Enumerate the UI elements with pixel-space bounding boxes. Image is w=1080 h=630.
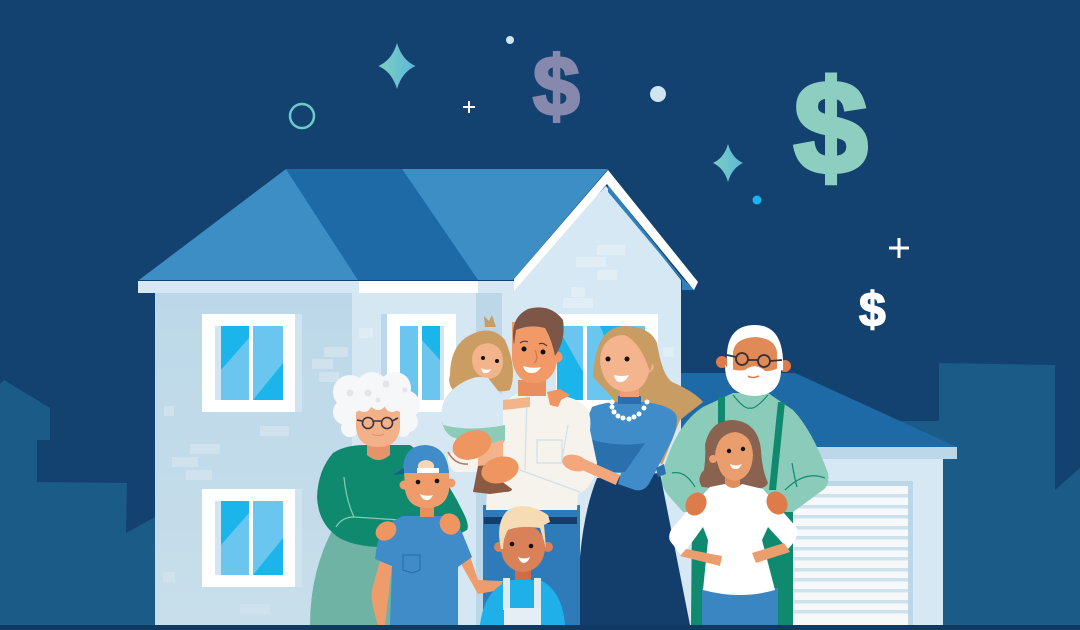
grandma skirt	[310, 525, 395, 625]
sleeve creases	[672, 463, 825, 490]
mom fringe	[622, 328, 653, 372]
garage eave	[680, 447, 957, 459]
girl jeans	[702, 588, 778, 625]
boy arms	[372, 556, 503, 625]
small boy shirt	[480, 580, 565, 625]
roof	[139, 169, 608, 280]
daughter boots	[473, 466, 512, 494]
window upper left	[202, 314, 302, 412]
mom necklace	[610, 400, 650, 422]
dad ear	[552, 352, 562, 362]
dad shirt	[448, 392, 597, 510]
girl face	[715, 432, 753, 481]
window right	[556, 314, 658, 412]
wall bricks	[163, 245, 674, 614]
grandma sweater	[317, 445, 468, 547]
dad trousers	[483, 505, 580, 625]
grandma hair curls	[346, 380, 408, 402]
daughter topknot	[484, 315, 496, 327]
dad eyes	[522, 346, 546, 354]
sweater creases	[336, 477, 400, 527]
skyline silhouettes	[0, 363, 1080, 630]
person: boy with cap	[372, 445, 503, 625]
dad hair	[513, 307, 564, 356]
boy pocket	[403, 555, 420, 573]
person: grandpa	[662, 325, 828, 625]
icon: large sparkle	[378, 43, 416, 89]
collar	[733, 395, 768, 408]
mom ear	[642, 362, 654, 372]
window middle	[381, 314, 456, 412]
mom face	[600, 335, 650, 392]
boy neck	[420, 505, 434, 517]
gable trim	[514, 170, 698, 291]
grandma hands on boy	[372, 509, 465, 545]
cap strap	[417, 468, 439, 473]
grandpa hair	[727, 325, 783, 370]
boy head	[404, 470, 449, 508]
grandma glasses	[357, 418, 398, 428]
shirt details	[520, 395, 580, 492]
daughter hair	[449, 330, 513, 392]
dad nose	[534, 350, 537, 363]
icon: plus right	[889, 238, 909, 258]
daughter hand on shoulder	[547, 389, 570, 407]
mom forearm	[582, 464, 618, 480]
house	[138, 169, 698, 625]
mom hand	[560, 452, 590, 474]
icon: blue dot	[752, 196, 762, 204]
person: mom	[578, 326, 703, 625]
boy shirt	[375, 516, 472, 625]
icon: plus	[463, 101, 475, 113]
decorative stars, dots and dollar signs	[290, 36, 909, 337]
grandpa hands on girl	[681, 488, 792, 519]
small boy ears	[494, 542, 553, 552]
grandpa ears	[716, 356, 791, 372]
grandma neck	[367, 443, 390, 460]
girl forearms	[680, 543, 790, 566]
ground strip	[0, 625, 1080, 630]
boy eyes	[416, 479, 439, 484]
daughter face	[472, 343, 503, 379]
person: girl	[669, 420, 797, 625]
dollar sign white: $	[859, 284, 886, 337]
girl eyes	[727, 447, 745, 453]
small boy eyes	[510, 542, 533, 548]
grandma hair	[333, 372, 420, 437]
dad face	[512, 322, 557, 383]
grandpa mouth	[748, 376, 759, 378]
girl smile	[730, 464, 742, 469]
dad brows	[520, 341, 547, 346]
girl ear	[709, 455, 717, 463]
grandma face	[356, 407, 400, 447]
house walls	[155, 186, 681, 625]
mom smile	[614, 375, 629, 382]
person: dad and daughter	[442, 307, 618, 625]
garage door frame	[780, 481, 913, 625]
daughter top	[442, 377, 503, 428]
dad lower hand	[478, 453, 522, 487]
mom belt	[656, 464, 666, 477]
daughter arm	[503, 397, 530, 410]
daughter legs	[478, 440, 503, 467]
grandma hair fringe	[357, 394, 399, 412]
daughter smile	[481, 368, 491, 373]
mom top	[587, 402, 677, 490]
garage wall	[680, 459, 943, 625]
icon: small sparkle	[713, 144, 743, 182]
dollar sign purple: $	[533, 39, 580, 133]
grandpa beard	[725, 365, 781, 396]
person: grandma	[310, 372, 468, 625]
mom skirt	[578, 473, 690, 625]
cap visor	[393, 468, 404, 475]
boy cap	[403, 445, 449, 473]
small boy hair	[499, 506, 550, 549]
overall bib	[504, 608, 541, 625]
mom neck	[620, 386, 639, 397]
dad bracelet	[448, 452, 468, 464]
icon: small dot	[506, 36, 514, 44]
grandpa shirt	[662, 393, 828, 512]
mom hair back	[593, 326, 703, 465]
daughter eyes	[481, 356, 499, 363]
dad neck	[518, 380, 546, 396]
dad upper hand	[448, 425, 496, 465]
dad smile	[523, 366, 541, 373]
icon: ring	[290, 104, 314, 128]
dad belt	[484, 517, 577, 524]
person: small boy	[480, 506, 565, 625]
grandpa cardigan lower	[691, 510, 793, 625]
girl neck	[725, 472, 740, 490]
boy smile	[420, 494, 433, 500]
garage door	[780, 486, 908, 625]
small boy smile	[518, 557, 530, 563]
boy ears	[400, 478, 456, 490]
grandpa glasses	[727, 353, 782, 367]
mom eyes	[606, 356, 630, 362]
small boy neck	[515, 568, 531, 580]
grandpa face	[733, 337, 777, 378]
daughter shorts	[442, 422, 505, 453]
small boy head	[501, 524, 545, 572]
grandma smile	[372, 434, 384, 436]
mom collar	[618, 396, 641, 404]
garage roof	[680, 373, 957, 447]
boy cap opening	[418, 460, 434, 468]
window lower left	[202, 489, 302, 587]
eave band	[138, 281, 518, 293]
girl hair	[699, 420, 768, 488]
garage	[680, 373, 957, 625]
girl shirt	[669, 484, 797, 595]
suspenders	[718, 397, 785, 490]
mom top shade	[587, 438, 645, 472]
dollar sign mint: $	[794, 54, 867, 201]
icon: large dot	[650, 86, 666, 102]
overall straps	[503, 578, 541, 610]
